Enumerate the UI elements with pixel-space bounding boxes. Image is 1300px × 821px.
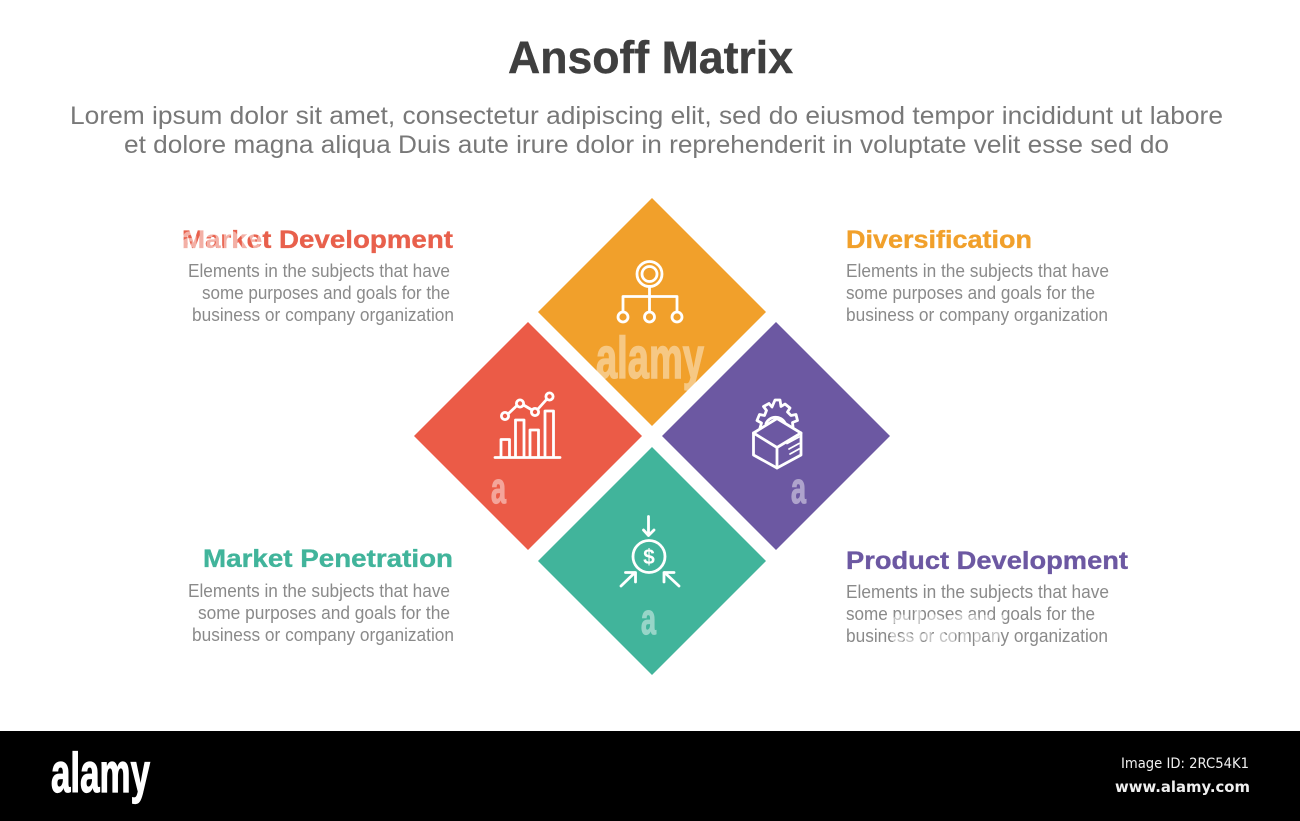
watermark: centre: alamy xyxy=(596,326,704,391)
text block: product development: Product Development xyxy=(846,547,1129,575)
text block: diversification: Diversification xyxy=(846,226,1032,254)
subtitle text: et dolore magna aliqua Duis aute irure dolor in reprehenderit in voluptate velit esse sed do xyxy=(124,131,1169,159)
text block: market penetration: some purposes and goals for the xyxy=(198,603,450,623)
watermark letters xyxy=(491,464,806,644)
watermark letters: a xyxy=(491,464,506,513)
text block: product development: some purposes and goals for the xyxy=(846,604,1095,624)
text block: market penetration xyxy=(188,545,454,645)
footer bar xyxy=(0,731,1300,821)
panel: diversification diamond xyxy=(538,198,766,426)
text block: market penetration: Market Penetration xyxy=(203,545,453,573)
panel: market penetration diamond xyxy=(538,447,766,675)
text block: diversification xyxy=(846,226,1109,325)
text block: product development: business or company organization xyxy=(846,626,1108,646)
icon: dollar coin with inward arrows: $ xyxy=(643,546,655,569)
text block: market penetration: Elements in the subjects that have xyxy=(188,581,450,601)
text block: product development: Elements in the subjects that have xyxy=(846,582,1109,602)
text block: diversification: Elements in the subjects that have xyxy=(846,261,1109,281)
text block: diversification: some purposes and goals for the xyxy=(846,283,1095,303)
watermark letters: a xyxy=(641,595,656,644)
text block: market development xyxy=(182,226,454,325)
subtitle text xyxy=(70,102,1223,159)
text block: market penetration: business or company organization xyxy=(192,625,454,645)
watermark over product development text: alamy xyxy=(890,597,1005,653)
image id: Image ID: 2RC54K1 xyxy=(1121,756,1249,772)
panel: market development diamond xyxy=(414,322,642,550)
diamond matrix xyxy=(414,198,890,675)
panel: product development diamond xyxy=(662,322,890,550)
text block: diversification: business or company organization xyxy=(846,305,1108,325)
footer logo: alamy xyxy=(51,741,150,804)
watermark letters: a xyxy=(791,464,806,513)
text block: market development: some purposes and goals for the xyxy=(202,283,450,303)
website url: www.alamy.com xyxy=(1115,778,1250,796)
icon: gear and box xyxy=(754,400,801,468)
subtitle text: Lorem ipsum dolor sit amet, consectetur adipiscing elit, sed do eiusmod tempor incididunt ut labore xyxy=(70,102,1223,130)
icon: dollar coin with inward arrows xyxy=(621,516,679,586)
icon: bar chart with trend line xyxy=(495,393,560,458)
text block: market development: Elements in the subjects that have xyxy=(188,261,450,281)
icon: organisation hierarchy xyxy=(618,262,682,322)
text block: product development xyxy=(846,547,1129,646)
title: Ansoff Matrix xyxy=(508,32,793,83)
text block: market development: Market Development xyxy=(182,226,454,254)
watermark over market development heading: alamy xyxy=(182,220,264,256)
text block: market development: business or company organization xyxy=(192,305,454,325)
